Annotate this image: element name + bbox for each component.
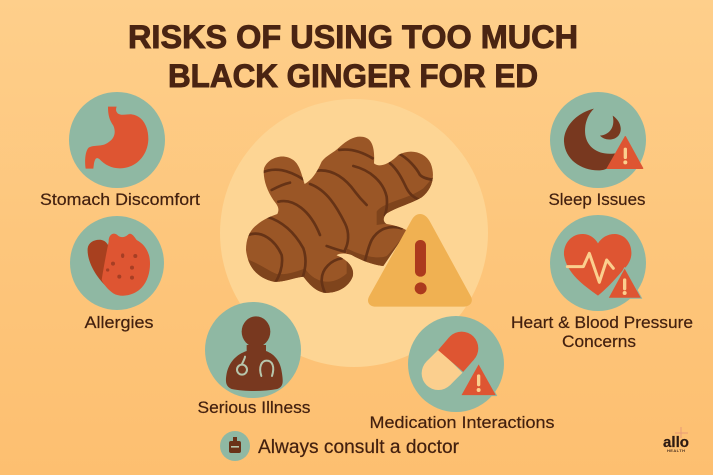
label: heart and blood pressure concerns: Concerns <box>562 332 636 351</box>
ginger shading and ridges <box>248 148 433 293</box>
panel: medication interactions <box>370 316 554 432</box>
icon: skin rash <box>70 216 164 310</box>
icon: stomach <box>69 92 165 188</box>
central glow circle <box>220 99 488 367</box>
label: allergies: Allergies <box>84 313 154 332</box>
logo: allo health <box>663 427 689 453</box>
icon: ginger root <box>246 136 433 293</box>
icon: badge <box>220 431 250 461</box>
icon: central warning triangle <box>368 214 472 307</box>
title <box>128 19 578 94</box>
label: heart and blood pressure concerns <box>511 313 693 351</box>
icon: moon with warning <box>550 92 646 188</box>
panel: stomach discomfort <box>40 92 200 209</box>
panel: sleep issues <box>548 92 646 209</box>
logo: allo health: allo <box>663 434 689 451</box>
panel: heart and blood pressure <box>511 215 693 351</box>
panel: allergies <box>70 216 164 332</box>
label: sleep issues: Sleep Issues <box>548 190 646 209</box>
callout: always consult a doctor <box>220 431 460 461</box>
label: medication interactions: Medication Interactions <box>370 413 554 432</box>
label: heart and blood pressure concerns: Heart & Blood Pressure <box>511 313 693 332</box>
icon: heart with warning <box>550 215 646 311</box>
label: stomach discomfort: Stomach Discomfort <box>40 190 200 209</box>
label: serious illness: Serious Illness <box>198 398 310 417</box>
icon: capsule with warning <box>408 316 504 412</box>
icon: doctor <box>205 302 301 398</box>
title: BLACK GINGER FOR ED <box>168 58 538 94</box>
panel: serious illness <box>198 302 310 417</box>
logo: allo health: HEALTH <box>667 448 685 453</box>
title: RISKS OF USING TOO MUCH <box>128 19 578 55</box>
callout text: Always consult a doctor <box>258 437 460 458</box>
